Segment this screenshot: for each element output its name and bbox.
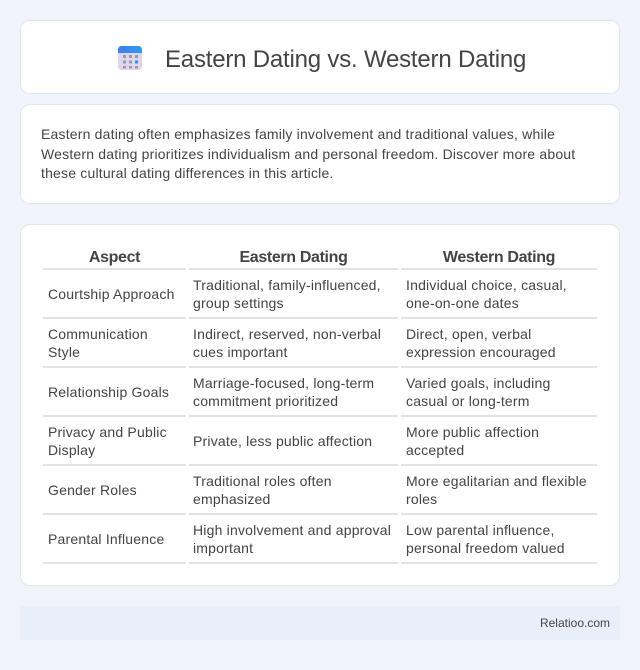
table headers (89, 249, 555, 266)
table rows: Varied goals, including (406, 375, 550, 391)
footer bar (20, 606, 620, 640)
intro panel (20, 104, 620, 204)
table rows: Indirect, reserved, non-verbal (193, 326, 381, 342)
table rows: More public affection (406, 424, 539, 440)
table rows: accepted (406, 442, 464, 458)
table rows: roles (406, 491, 437, 507)
table rows: Individual choice, casual, (406, 277, 567, 293)
table rows: commitment prioritized (193, 393, 338, 409)
table rows: Low parental influence, (406, 522, 555, 538)
table rows: Display (48, 442, 95, 458)
intro text (41, 126, 576, 181)
title: Eastern Dating vs. Western Dating (165, 46, 526, 73)
table rows: Gender Roles (48, 482, 137, 498)
table headers: Eastern Dating (239, 249, 348, 266)
table rows: Marriage-focused, long-term (193, 375, 374, 391)
table rows: expression encouraged (406, 344, 556, 360)
table rows: Traditional roles often (193, 473, 332, 489)
intro text: these cultural dating differences in this article. (41, 165, 334, 181)
header panel (20, 20, 620, 94)
footer brand: Relatioo.com (540, 616, 610, 630)
table rows: More egalitarian and flexible (406, 473, 587, 489)
table rows: Private, less public affection (193, 433, 372, 449)
intro text: Eastern dating often emphasizes family involvement and traditional values, while (41, 126, 555, 142)
table rows: group settings (193, 295, 284, 311)
table rows: Communication (48, 326, 148, 342)
table rows: Style (48, 344, 80, 360)
table rows: casual or long-term (406, 393, 530, 409)
table rows: Traditional, family-influenced, (193, 277, 381, 293)
table rows: Relationship Goals (48, 384, 169, 400)
table rows: Privacy and Public (48, 424, 167, 440)
table rows: cues important (193, 344, 288, 360)
table headers: Aspect (89, 249, 140, 266)
table rows: Courtship Approach (48, 286, 175, 302)
icon: calendar (118, 46, 142, 70)
table rows: personal freedom valued (406, 540, 565, 556)
table rows: one-on-one dates (406, 295, 519, 311)
panel: comparison table (20, 224, 620, 586)
table rows: emphasized (193, 491, 270, 507)
table rows (43, 268, 597, 564)
table rows: Parental Influence (48, 531, 164, 547)
table rows: High involvement and approval (193, 522, 391, 538)
intro text: Western dating prioritizes individualism and personal freedom. Discover more about (41, 146, 575, 162)
table headers: Western Dating (443, 249, 555, 266)
table rows: Direct, open, verbal (406, 326, 531, 342)
table rows: important (193, 540, 253, 556)
